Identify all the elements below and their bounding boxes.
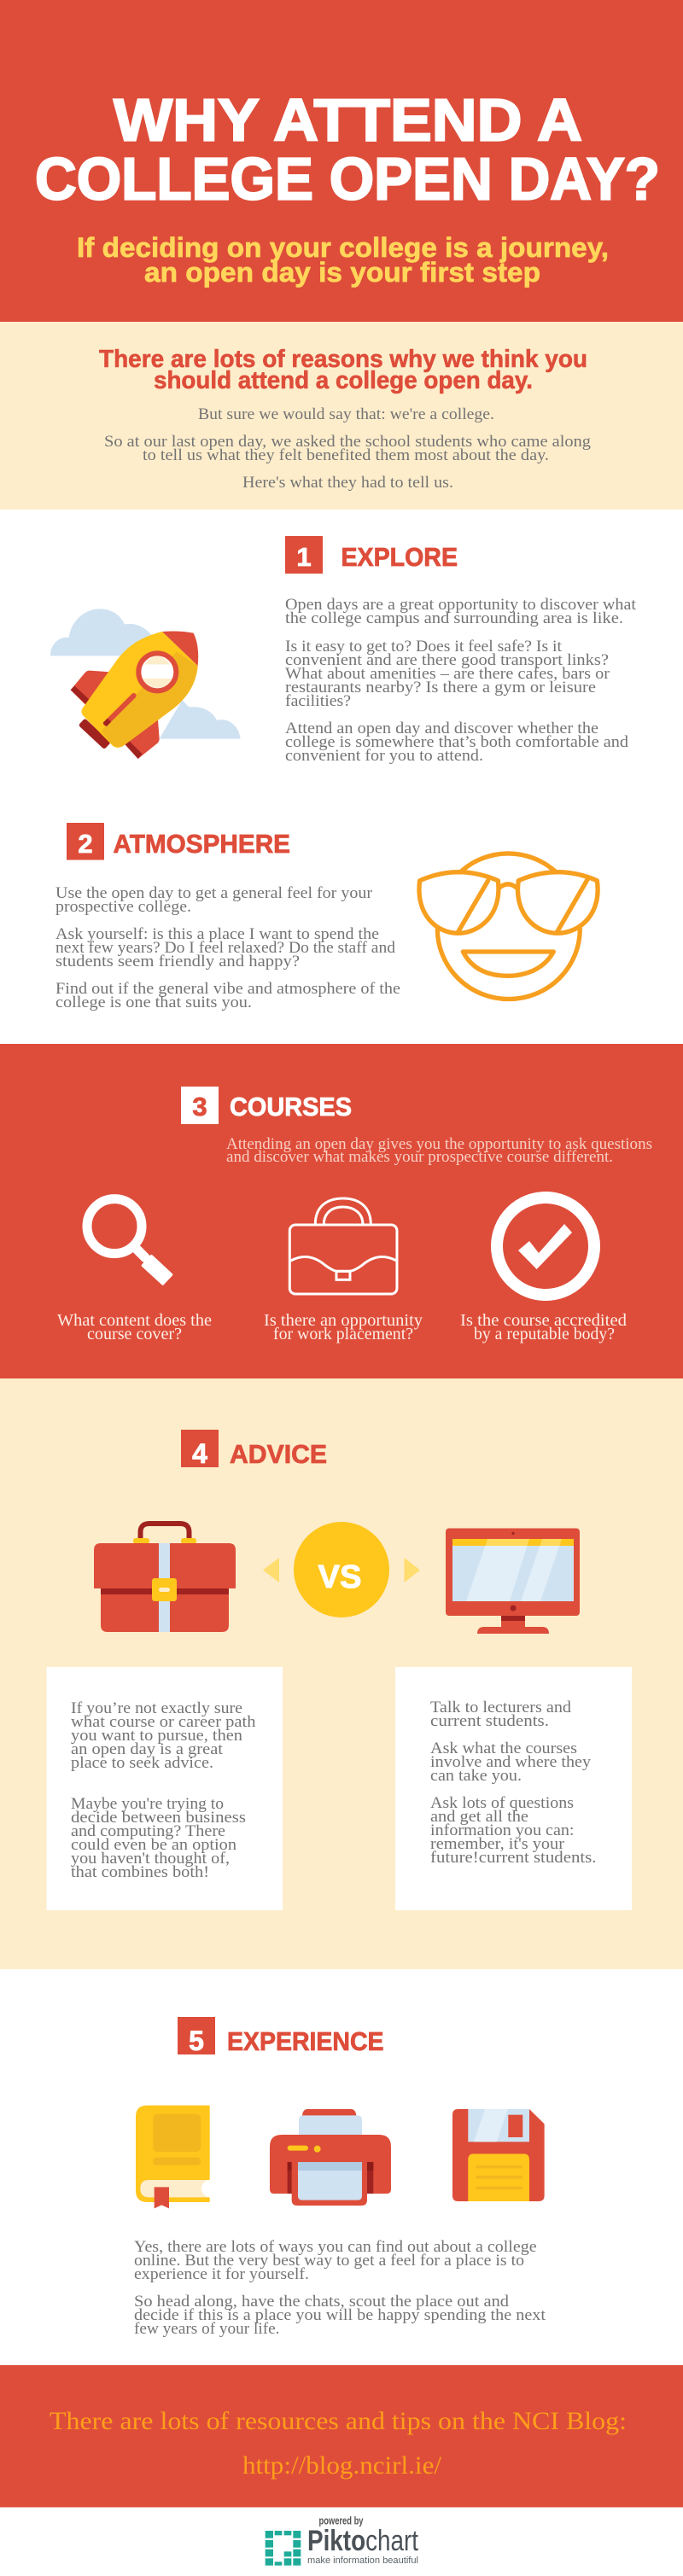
title: WHY ATTEND A xyxy=(114,87,582,154)
text: atmosphere: Use the open day to get a general feel for your xyxy=(55,884,373,902)
text: explore: convenient for you to attend. xyxy=(285,747,483,765)
card: right text: current students. xyxy=(430,1712,549,1730)
text: experience: So head along, have the chats, scout the place out and xyxy=(134,2293,510,2311)
icon: right arrow xyxy=(405,1558,420,1582)
subtitle: If deciding on your college is a journey, xyxy=(77,232,609,263)
badge 5 xyxy=(178,2017,215,2056)
heading: experience: EXPERIENCE xyxy=(227,2026,384,2056)
panel: 4 advice xyxy=(0,1378,683,1969)
intro heading: should attend a college open day. xyxy=(154,367,533,394)
icon: book xyxy=(136,2106,219,2208)
text: experience: decide if this is a place you will be happy spending the next xyxy=(134,2306,546,2324)
text: explore: What about amenities – are there cafes, bars or xyxy=(285,665,610,683)
panel: header xyxy=(0,0,683,322)
text: explore: college is somewhere that’s both comfortable and xyxy=(285,733,629,751)
icon: floppy disk xyxy=(452,2109,545,2201)
footer: piktochart logo xyxy=(266,2515,418,2566)
caption: content: What content does the xyxy=(57,1311,212,1330)
badge 1 xyxy=(285,536,323,574)
panel: 1 explore xyxy=(50,536,637,765)
caption: accreditation: by a reputable body? xyxy=(474,1325,615,1343)
icon: computer monitor xyxy=(446,1528,580,1634)
card: right text: and get all the xyxy=(430,1808,528,1826)
icon: red briefcase xyxy=(94,1524,236,1632)
text: atmosphere xyxy=(55,884,400,1011)
badge 2: 2 xyxy=(78,829,93,859)
text: piktochart: Piktochart xyxy=(307,2525,418,2557)
card: left text: Maybe you're trying to xyxy=(71,1795,224,1813)
icon: check mark circle xyxy=(497,1198,594,1295)
text: tagline: make information beautiful xyxy=(307,2556,418,2566)
card: right text: Talk to lecturers and xyxy=(430,1699,572,1716)
card: left text: If you’re not exactly sure xyxy=(71,1699,242,1717)
card: left text: an open day is a great xyxy=(71,1740,224,1758)
text: explore xyxy=(285,596,637,765)
text: atmosphere: college is one that suits you. xyxy=(55,994,252,1011)
icon: printer xyxy=(270,2109,391,2206)
text: experience xyxy=(134,2238,546,2338)
text: experience: experience it for yourself. xyxy=(134,2265,309,2283)
card: right text: can take you. xyxy=(430,1767,522,1785)
text: explore: restaurants nearby? Is there a gym or leisure xyxy=(285,679,596,696)
text: atmosphere: prospective college. xyxy=(55,898,191,916)
card: right text: remember, it's your xyxy=(430,1835,565,1853)
caption: work placement: Is there an opportunity xyxy=(264,1311,423,1330)
panel: introduction xyxy=(0,322,683,510)
card: left text: you haven't thought of, xyxy=(71,1850,230,1868)
intro heading: There are lots of reasons why we think you xyxy=(99,346,587,373)
card: left text: decide between business xyxy=(71,1809,246,1827)
badge 4 xyxy=(181,1430,219,1469)
text: explore: Open days are a great opportunity to discover what xyxy=(285,596,637,614)
intro text: But sure we would say that: we're a college. xyxy=(198,405,494,423)
caption: content xyxy=(57,1311,212,1343)
panel: blog call to action xyxy=(0,2365,683,2508)
panel: 5 experience xyxy=(134,2017,546,2338)
card: left text: you want to pursue, then xyxy=(71,1727,243,1745)
badge 5: 5 xyxy=(189,2025,204,2056)
text: atmosphere: students seem friendly and happy? xyxy=(55,953,300,970)
subtitle: an open day is your first step xyxy=(144,257,540,288)
card: left text: what course or career path xyxy=(71,1713,256,1731)
intro heading xyxy=(99,346,587,394)
panel: 3 courses xyxy=(0,1044,683,1378)
title xyxy=(35,87,660,212)
text: atmosphere: Find out if the general vibe and atmosphere of the xyxy=(55,980,400,998)
icon: magnifying glass xyxy=(87,1199,172,1284)
caption: work placement xyxy=(264,1311,423,1343)
text: courses: Attending an open day gives you the opportunity to ask questions xyxy=(226,1135,652,1153)
badge 3 xyxy=(181,1087,219,1124)
heading: advice: ADVICE xyxy=(230,1439,327,1469)
text: atmosphere: Ask yourself: is this a place I want to spend the xyxy=(55,925,379,943)
text: atmosphere: next few years? Do I feel relaxed? Do the staff and xyxy=(55,939,396,957)
icon: left arrow xyxy=(263,1558,279,1582)
icon: rocket xyxy=(50,609,241,759)
text: explore: convenient and are there good transport links? xyxy=(285,651,609,669)
card: left text: could even be an option xyxy=(71,1836,237,1854)
caption: accreditation xyxy=(460,1311,627,1343)
intro text: So at our last open day, we asked the school students who came along xyxy=(104,433,592,451)
icon: piktochart mark xyxy=(266,2531,301,2566)
subtitle xyxy=(77,232,609,288)
text: explore: the college campus and surrounding area is like. xyxy=(285,609,623,627)
text: courses xyxy=(226,1135,652,1166)
intro text: to tell us what they felt benefited them most about the day. xyxy=(143,446,549,464)
heading: explore: EXPLORE xyxy=(342,542,458,572)
caption: accreditation: Is the course accredited xyxy=(460,1311,627,1330)
title: COLLEGE OPEN DAY? xyxy=(35,145,660,212)
badge 4: 4 xyxy=(192,1438,207,1469)
icon: versus circle: VS xyxy=(318,1559,362,1595)
panel: 2 atmosphere xyxy=(55,823,598,1011)
card: left text: that combines both! xyxy=(71,1863,209,1881)
card: left text xyxy=(46,1667,283,1910)
text: experience: online. But the very best way to get a feel for a place is to xyxy=(134,2252,524,2270)
text: blog address: http://blog.ncirl.ie/ xyxy=(242,2451,442,2480)
intro text xyxy=(104,405,592,492)
icon: smiley with sunglasses xyxy=(419,854,598,999)
text: courses: and discover what makes your prospective course different. xyxy=(226,1148,613,1166)
card: right text: Ask lots of questions xyxy=(430,1794,574,1812)
card: left text: place to seek advice. xyxy=(71,1754,213,1772)
card: right text xyxy=(395,1667,632,1910)
text: powered by: powered by xyxy=(319,2515,364,2526)
card: left text: and computing? There xyxy=(71,1822,225,1840)
text: explore: Attend an open day and discover whether the xyxy=(285,720,598,737)
card: right text: Ask what the courses xyxy=(430,1740,577,1757)
text: explore: facilities? xyxy=(285,692,351,710)
caption: work placement: for work placement? xyxy=(273,1325,413,1343)
heading: atmosphere: ATMOSPHERE xyxy=(113,829,290,859)
icon: briefcase outline xyxy=(289,1198,397,1294)
badge 3: 3 xyxy=(192,1092,207,1122)
card: right text: future!current students. xyxy=(430,1849,596,1867)
heading: courses: COURSES xyxy=(230,1092,352,1122)
badge 2 xyxy=(67,823,104,860)
text: explore: Is it easy to get to? Does it feel safe? Is it xyxy=(285,638,563,656)
card: right text: involve and where they xyxy=(430,1753,592,1771)
intro text: Here's what they had to tell us. xyxy=(242,474,453,492)
caption: content: course cover? xyxy=(87,1325,182,1343)
badge 1: 1 xyxy=(296,542,312,572)
icon: versus circle xyxy=(294,1522,389,1617)
text: blog message: There are lots of resources and tips on the NCI Blog: xyxy=(50,2407,627,2435)
card: right text: information you can: xyxy=(430,1821,574,1839)
text: experience: few years of your life. xyxy=(134,2320,280,2338)
text: experience: Yes, there are lots of ways you can find out about a college xyxy=(134,2238,537,2256)
